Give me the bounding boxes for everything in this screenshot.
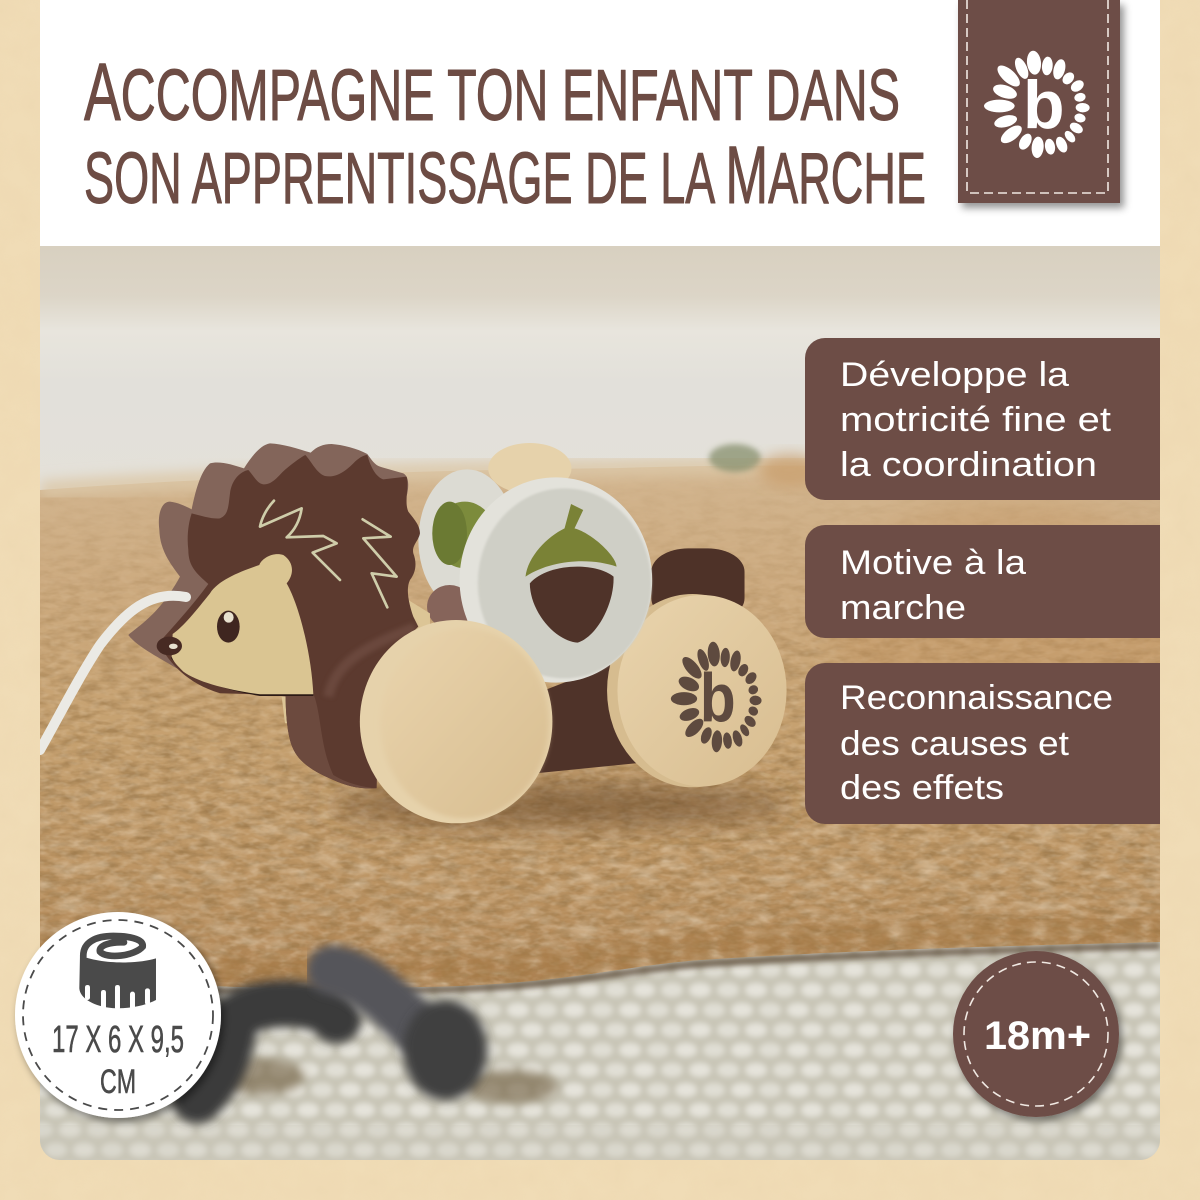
front face xyxy=(158,455,420,788)
brand logo xyxy=(984,50,1090,158)
rope knot xyxy=(403,1000,487,1100)
benefit: motor skills: Développe la xyxy=(840,356,1069,394)
title: SON APPRENTISSAGE DE LA MARCHE xyxy=(84,130,926,221)
blurred dark rope foreground xyxy=(197,970,558,1103)
hedgehog pull toy xyxy=(40,443,787,823)
wheel logo xyxy=(671,641,762,753)
age badge: 18m+ xyxy=(984,1014,1091,1058)
wheel logo: b xyxy=(700,660,736,737)
rose brown piece xyxy=(427,585,468,622)
rear dark cylinder xyxy=(651,548,744,606)
rug fringe xyxy=(40,928,1160,973)
cream knob xyxy=(488,443,571,494)
acorn xyxy=(526,504,617,643)
wall background xyxy=(40,246,1160,496)
quill marks xyxy=(260,501,397,607)
title xyxy=(84,47,926,221)
neck highlight xyxy=(328,627,415,697)
rope grey strand xyxy=(333,970,418,1030)
icon: measuring tape xyxy=(79,936,156,1010)
product photo xyxy=(20,246,1190,1180)
white floor rug xyxy=(40,942,1160,1160)
benefit: motor skills: la coordination xyxy=(840,446,1097,484)
rope dark strand xyxy=(197,1003,336,1100)
behind parts xyxy=(418,443,745,628)
dimensions badge: CM xyxy=(100,1063,136,1101)
benefit: cause and effect: des causes et xyxy=(840,725,1070,763)
pull string xyxy=(40,596,186,750)
benefit: motor skills xyxy=(805,338,1160,500)
side silhouette xyxy=(128,443,408,696)
benefit: walking: marche xyxy=(840,589,966,627)
nose xyxy=(157,637,182,655)
eye xyxy=(217,611,240,643)
tail tabs xyxy=(282,600,430,723)
dimensions badge: 17 X 6 X 9,5 xyxy=(52,1019,184,1061)
benefit: walking: Motive à la xyxy=(840,544,1026,582)
toy shadow xyxy=(330,785,790,825)
cart base xyxy=(536,663,636,773)
brand tag xyxy=(958,0,1120,203)
rear wheel xyxy=(607,594,787,787)
front wheel xyxy=(360,620,552,823)
rope shadows xyxy=(219,1058,558,1103)
jaw line xyxy=(172,657,313,695)
grey acorn disc xyxy=(460,477,652,683)
hedgehog xyxy=(128,443,430,788)
cream face xyxy=(172,554,313,694)
benefit: cause and effect: des effets xyxy=(840,769,1004,807)
front parts xyxy=(360,477,787,823)
green axle xyxy=(432,502,486,568)
benefit: cause and effect xyxy=(805,663,1160,824)
benefit: walking xyxy=(805,525,1160,638)
age badge xyxy=(953,951,1119,1117)
dimensions badge xyxy=(15,912,221,1118)
brand logo: b xyxy=(1023,67,1065,143)
back grey disc xyxy=(418,470,504,592)
benefit: motor skills: motricité fine et xyxy=(840,401,1112,439)
lower body lighter band xyxy=(286,695,377,788)
jute rug xyxy=(40,444,1190,1000)
header band xyxy=(40,0,1160,246)
benefit: cause and effect: Reconnaissance xyxy=(840,679,1113,717)
